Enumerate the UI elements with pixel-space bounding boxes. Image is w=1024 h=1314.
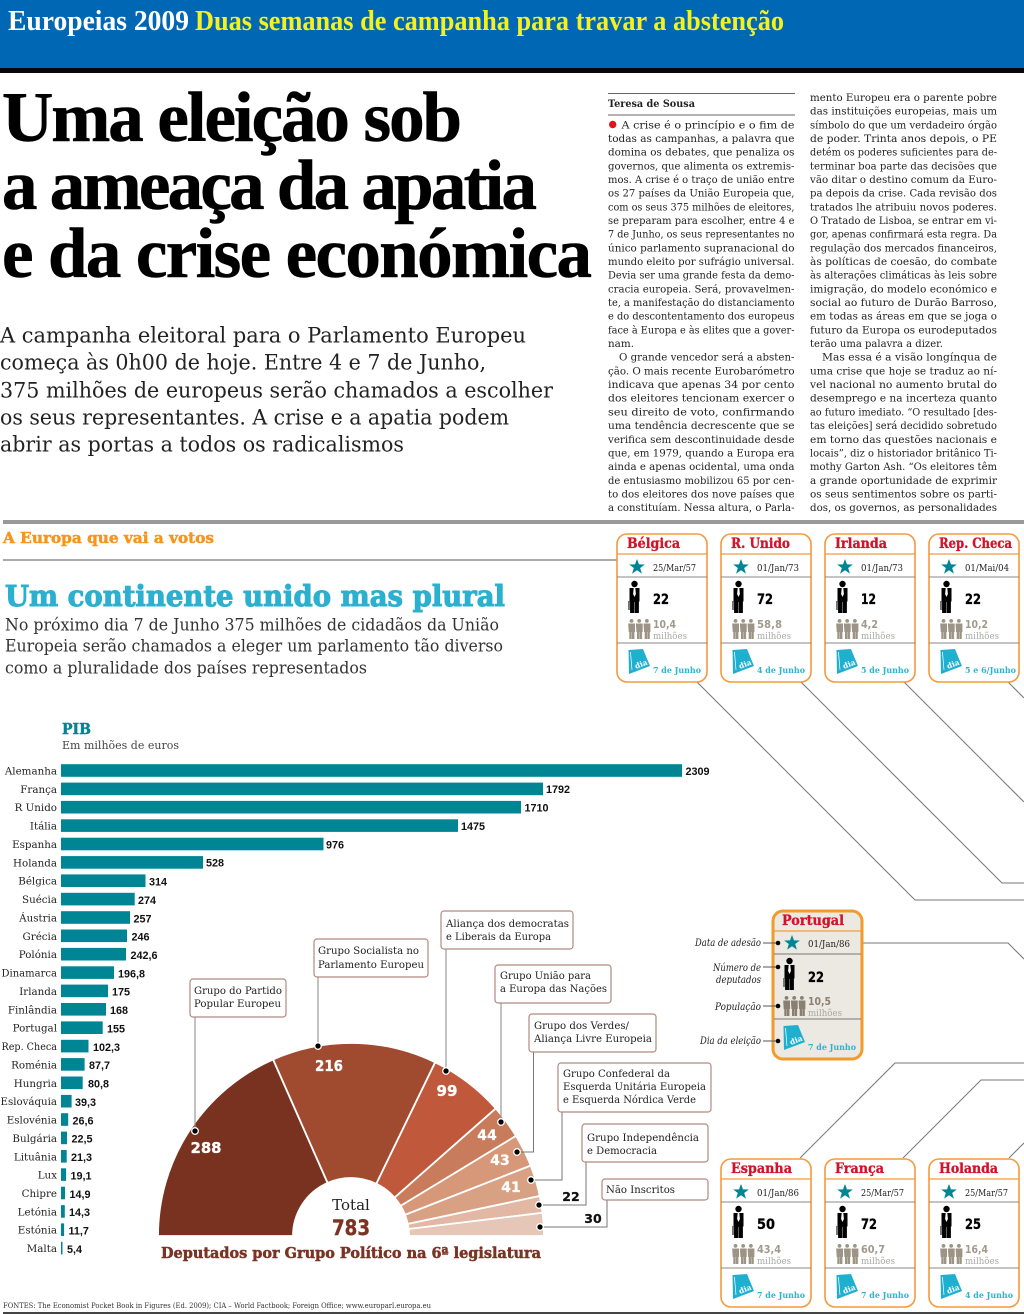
main headline: a ameaça da apatia — [2, 147, 537, 225]
article column 1: indicava que apenas 34 por cento — [608, 379, 794, 391]
card: Holanda: 25/Mar/57 — [965, 1188, 1008, 1199]
article column 1: te, a manifestação do distanciamento — [608, 297, 794, 309]
article column 2: social ao futuro de Durão Barroso, — [810, 297, 997, 309]
country labels: Rep. Checa — [2, 1041, 57, 1053]
seat numbers: 43 — [490, 1153, 510, 1169]
bar values — [67, 766, 710, 1256]
main headline — [2, 79, 592, 293]
card: França: 25/Mar/57 — [861, 1188, 904, 1199]
card: Rep. Checa: 10,2 — [965, 618, 988, 631]
bar values: 14,3 — [69, 1207, 90, 1219]
article column 1: que, em 1979, quando a Europa era — [608, 447, 794, 459]
card: Holanda — [929, 1159, 1019, 1307]
infographic intro: No próximo dia 7 de Junho 375 milhões de cidadãos da União — [5, 616, 499, 634]
callout: Grupo Socialista no Parlamento Europeu: Parlamento Europeu — [318, 959, 424, 971]
country labels: Lux — [38, 1170, 57, 1182]
article column 2: gor, apenas confirmará esta regra. Da — [810, 229, 997, 241]
callout: Grupo Confederal da Esquerda Unitária Europeia e Esquerda Nórdica Verde: Esquerda Unitária Europeia — [563, 1081, 706, 1093]
card: Bélgica: dia — [633, 658, 649, 671]
country labels: Itália — [30, 821, 57, 833]
chart heading: PIB: Em milhões de euros — [62, 739, 179, 752]
article column 1: cracia europeia. Será, provavelmen- — [608, 283, 795, 295]
article column 2: terminar boa parte das decisões que — [810, 160, 997, 172]
country labels — [0, 766, 57, 1255]
country labels: Dinamarca — [2, 968, 57, 980]
card: Espanha: 43,4 — [757, 1243, 781, 1256]
card: Rep. Checa: milhões — [965, 631, 999, 642]
callout: Grupo Independência e Democracia: e Democracia — [587, 1145, 657, 1157]
wedge: UEN 44 — [394, 1108, 516, 1206]
callout: Grupo do Partido Popular Europeu: Popular Europeu — [194, 998, 281, 1010]
article column 2: os seus sentimentos sobre os parti- — [810, 488, 997, 500]
callout: Grupo dos Verdes/Aliança Livre Europeia — [514, 1014, 656, 1155]
country labels: Bélgica — [18, 876, 57, 888]
callout: Não Inscritos — [537, 1179, 708, 1230]
country labels: Letónia — [18, 1206, 57, 1218]
card: Rep. Checa: 22 — [965, 592, 981, 608]
card: R. Unido — [721, 534, 811, 682]
article column 2: uma crise que hoje se traduz ao ní- — [810, 365, 997, 377]
country labels: Holanda — [13, 857, 57, 869]
article column 2: de poder. Trinta anos depois, o PE — [810, 133, 997, 145]
article column 1: mundo eleito por sufrágio universal. — [608, 256, 794, 268]
red bullet — [609, 121, 616, 128]
bar values: 2309 — [686, 766, 710, 778]
bar values: 102,3 — [93, 1042, 120, 1054]
article column 1: 7 de Junho, os seus representantes no — [608, 229, 794, 241]
article column 1: governos, que alimenta os extremis- — [608, 160, 795, 172]
article column 2: às alterações climáticas às leis sobre — [810, 270, 997, 282]
article column 2: locais”, diz o historiador britânico Ti- — [810, 447, 997, 459]
wedge: PPE 288 — [158, 1059, 328, 1236]
country labels: Roménia — [11, 1059, 57, 1071]
callout: Grupo União para a Europa das Nações: a Europa das Nações — [500, 983, 607, 995]
section tag: A Europa que vai a votos — [2, 529, 214, 547]
section headline: Duas semanas de campanha para travar a abstenção — [195, 6, 784, 37]
article column 2: pa depois da crise. Cada revisão dos — [810, 188, 997, 200]
card: Bélgica: Bélgica — [627, 536, 680, 552]
card: Irlanda: milhões — [861, 631, 895, 642]
article column 2: terão uma palavra a dizer. — [810, 338, 943, 350]
article column 2: desemprego e na incerteza quanto — [810, 393, 997, 405]
article column 1: Devia ser uma grande festa da demo- — [608, 270, 795, 282]
card: França: 60,7 — [861, 1243, 885, 1256]
standfirst: 375 milhões de europeus serão chamados a escolher — [0, 378, 554, 402]
country labels: Lituânia — [14, 1151, 57, 1163]
header band — [0, 0, 1024, 73]
article column 2: símbolo do que um verdadeiro órgão — [810, 119, 997, 131]
country labels: Portugal — [13, 1023, 57, 1035]
legend: dia da eleição: Dia da eleição — [699, 1036, 761, 1047]
country labels: Irlanda — [19, 986, 57, 998]
country labels: Áustria — [18, 910, 57, 924]
card: França: França — [835, 1161, 884, 1177]
article column 2: mothy Garton Ash. “Os eleitores têm — [810, 461, 997, 473]
article column 2: vel nacional no aumento brutal do — [809, 379, 997, 391]
article column 2: futuro da Europa os eurodeputados — [810, 324, 997, 336]
article column 1 — [607, 119, 795, 514]
card: R. Unido: milhões — [757, 631, 791, 642]
bar values: 168 — [110, 1005, 128, 1017]
card: Irlanda: Irlanda — [835, 536, 887, 552]
infographic intro: como a pluralidade dos países representados — [5, 658, 367, 678]
chart total — [332, 1196, 370, 1240]
article column 1: domina os debates, que penaliza os — [608, 147, 794, 159]
standfirst — [0, 324, 554, 456]
seat numbers: 99 — [436, 1082, 458, 1100]
article column 1: dos eleitores tencionam exercer o — [608, 393, 794, 405]
country labels: Eslováquia — [0, 1096, 57, 1108]
card: França: 7 de Junho — [861, 1291, 909, 1301]
country labels: Estónia — [18, 1225, 57, 1237]
country labels: Bulgária — [12, 1133, 57, 1145]
country labels: Grécia — [23, 931, 57, 943]
bar values: 976 — [326, 839, 344, 851]
callout: Grupo União para a Europa das Nações — [495, 965, 611, 1125]
country labels: Espanha — [12, 839, 57, 851]
chart total: Total — [332, 1196, 370, 1214]
article column 1: ção. O mais recente Eurobarómetro — [608, 365, 794, 377]
card: Espanha: 50 — [757, 1217, 775, 1233]
article column 1: uma tendência decrescente que se — [608, 420, 794, 432]
article column 2: mento Europeu era o parente pobre — [810, 92, 997, 104]
article column 1: se preparam para escolher, entre 4 e — [608, 215, 794, 227]
legend: data de adesão: Data de adesão — [694, 938, 761, 949]
callout: Grupo Socialista no Parlamento Europeu — [314, 939, 428, 1049]
country labels: Malta — [27, 1243, 57, 1255]
bar values: 274 — [138, 895, 156, 907]
section label: Europeias 2009 — [8, 6, 189, 37]
card: França: milhões — [861, 1256, 895, 1267]
article column 2: a grande oportunidade de exprimir — [810, 475, 998, 487]
callout: Grupo Independência e Democracia — [536, 1124, 708, 1208]
bar values: 1710 — [524, 802, 549, 814]
article column 2: às políticas de coesão, do combate — [810, 256, 997, 268]
infographic heading: Um continente unido mas plural — [5, 579, 505, 613]
article column 2: Mas essa é a visão longínqua de — [822, 352, 997, 364]
callout: Grupo do Partido Popular Europeu: Grupo do Partido — [194, 985, 282, 997]
callout: Aliança dos democratas e Liberais da Europa: Aliança dos democratas — [445, 918, 569, 930]
article column 1: A crise é o princípio e o fim de — [620, 119, 794, 131]
main headline: e da crise económica — [2, 215, 592, 293]
seat numbers — [190, 1057, 602, 1226]
bar values: 155 — [107, 1024, 125, 1036]
seat numbers: 288 — [190, 1139, 222, 1157]
card: Espanha: milhões — [757, 1256, 791, 1267]
article column 1: e do descontentamento dos europeus — [608, 311, 794, 323]
bar values: 1792 — [546, 784, 570, 796]
card: Portugal with legend: 10,5 — [808, 995, 831, 1008]
card: Espanha: dia — [737, 1283, 753, 1296]
card: Bélgica: 25/Mar/57 — [653, 563, 696, 574]
card: Holanda: milhões — [965, 1256, 999, 1267]
article column 1: O grande vencedor será a absten- — [619, 352, 795, 364]
card: Irlanda: 4,2 — [861, 618, 878, 631]
callout: Aliança dos democratas e Liberais da Europa — [441, 911, 573, 1074]
card: França: 72 — [861, 1217, 877, 1233]
article column 2: O Tratado de Lisboa, se entrar em vi- — [810, 215, 997, 227]
card: Espanha: 01/Jan/86 — [757, 1188, 799, 1199]
country labels: Hungria — [14, 1078, 57, 1090]
standfirst: começa às 0h00 de hoje. Entre 4 e 7 de Junho, — [0, 350, 486, 374]
card: Espanha: 7 de Junho — [757, 1291, 805, 1301]
card: Holanda: dia — [945, 1283, 961, 1296]
legend: população: População — [714, 1002, 761, 1013]
card: Rep. Checa: dia — [945, 658, 961, 671]
bar values: 242,6 — [130, 950, 158, 962]
card: Portugal with legend: 22 — [808, 970, 824, 986]
standfirst: abrir as portas a todos os radicalismos — [0, 432, 404, 456]
article column 1: to dos eleitores dos nove países que — [608, 488, 794, 500]
card: Rep. Checa: 01/Mai/04 — [965, 563, 1009, 574]
card: Portugal with legend: dia — [788, 1034, 804, 1047]
card: Irlanda: dia — [841, 658, 857, 671]
country labels: Suécia — [22, 894, 57, 906]
country labels: Finlândia — [8, 1004, 57, 1016]
article column 1: face à Europa e às elites que a gover- — [608, 324, 795, 336]
seat numbers: 22 — [562, 1189, 580, 1204]
bar values: 1475 — [461, 821, 485, 833]
card: Irlanda — [825, 534, 915, 682]
card: Bélgica: 10,4 — [653, 618, 676, 631]
standfirst: A campanha eleitoral para o Parlamento Europeu — [0, 324, 526, 348]
card: Portugal with legend: Portugal — [782, 913, 844, 929]
article column 2: tas eleições] será decidido sobretudo — [810, 420, 997, 432]
card: Portugal with legend: 7 de Junho — [808, 1043, 856, 1053]
card: Holanda: 4 de Junho — [965, 1291, 1013, 1301]
bar chart: PIB — [0, 764, 710, 1256]
callout: Grupo dos Verdes/Aliança Livre Europeia: Aliança Livre Europeia — [533, 1033, 652, 1045]
card: Bélgica: milhões — [653, 631, 687, 642]
card: Espanha — [721, 1159, 811, 1307]
wedge: GUE 41 — [405, 1166, 540, 1224]
country labels: Polónia — [19, 949, 57, 961]
chart total: 783 — [332, 1216, 370, 1240]
legend: número de deputados: Número de — [712, 963, 761, 974]
bar values: 175 — [112, 987, 130, 999]
card: R. Unido: 01/Jan/73 — [757, 563, 799, 574]
article column 1: único parlamento supranacional do — [608, 242, 794, 254]
country labels: Alemanha — [4, 766, 57, 778]
article column 1: a constituíam. Nessa altura, o Parla- — [608, 502, 795, 514]
card: Portugal with legend — [694, 911, 862, 1059]
article column 1: mos. A crise é o traço de união entre — [608, 174, 794, 186]
bar values: 39,3 — [75, 1097, 96, 1109]
card: R. Unido: 72 — [757, 592, 773, 608]
infographic intro: Europeia serão chamados a eleger um parlamento tão diverso — [5, 636, 503, 656]
card: Bélgica — [617, 534, 707, 682]
card: Holanda: 16,4 — [965, 1243, 988, 1256]
card: Holanda: 25 — [965, 1217, 981, 1233]
article column 2 — [809, 92, 998, 514]
article column 2: dos, os governos, as personalidades — [810, 502, 997, 514]
bar values: 21,3 — [71, 1152, 92, 1164]
bar values: 257 — [134, 913, 152, 925]
card: Portugal with legend: milhões — [808, 1008, 842, 1019]
bar values: 528 — [206, 858, 224, 870]
chart heading: PIB — [62, 721, 179, 752]
card: Irlanda: 01/Jan/73 — [861, 563, 903, 574]
card: R. Unido: R. Unido — [731, 536, 790, 552]
seat numbers: 30 — [584, 1211, 602, 1226]
country labels: Chipre — [22, 1188, 57, 1200]
article column 1: todas as campanhas, a palavra que — [608, 133, 794, 145]
card: Rep. Checa: 5 e 6/Junho — [965, 666, 1016, 676]
sources footer: FONTES: The Economist Pocket Book in Figures (Ed. 2009); CIA – World Factbook; Foreign Office; www.europarl.europa.eu — [3, 1301, 431, 1310]
article column 2: vão ditar o destino comum da Euro- — [809, 174, 997, 186]
bar values: 22,5 — [72, 1134, 93, 1146]
card: Holanda: Holanda — [939, 1161, 998, 1177]
seat numbers: 216 — [315, 1057, 343, 1075]
infographic intro — [5, 616, 503, 678]
callout: Grupo Confederal da Esquerda Unitária Europeia e Esquerda Nórdica Verde — [528, 1063, 711, 1183]
article column 2: detém os poderes suficientes para de- — [810, 147, 997, 159]
card: R. Unido: 4 de Junho — [757, 666, 805, 676]
callout: Aliança dos democratas e Liberais da Europa: e Liberais da Europa — [446, 931, 551, 943]
seat numbers: 41 — [501, 1180, 521, 1196]
legend: número de deputados — [712, 963, 780, 986]
bar values: 11,7 — [68, 1226, 89, 1238]
card: Bélgica: 7 de Junho — [653, 666, 701, 676]
article column 1: seu direito de voto, confirmando — [608, 406, 794, 418]
main headline: Uma eleição sob — [2, 79, 462, 157]
card: Espanha: Espanha — [731, 1161, 792, 1177]
bar values: 314 — [149, 876, 167, 888]
seat numbers: 44 — [477, 1128, 497, 1144]
card: Rep. Checa — [929, 534, 1019, 682]
card: França — [825, 1159, 915, 1307]
callout: Grupo Independência e Democracia: Grupo Independência — [587, 1132, 699, 1144]
callout: Grupo Socialista no Parlamento Europeu: Grupo Socialista no — [318, 945, 419, 957]
card: Portugal with legend: 01/Jan/86 — [808, 939, 850, 950]
article column 1: verifica sem descontinuidade desde — [607, 434, 794, 446]
callout: Grupo Confederal da Esquerda Unitária Europeia e Esquerda Nórdica Verde: Grupo Confederal da — [563, 1068, 670, 1080]
article column 1: de entusiasmo mobilizou 65 por cen- — [608, 475, 795, 487]
bar values: 196,8 — [118, 968, 145, 980]
article column 2: em todas as áreas em que se joga o — [810, 311, 997, 323]
callout: Não Inscritos: Não Inscritos — [606, 1184, 675, 1196]
byline: Teresa de Sousa — [608, 98, 695, 110]
bar values: 14,9 — [70, 1189, 91, 1201]
wedge: NI 30 — [409, 1213, 544, 1236]
country labels: Eslovénia — [7, 1114, 57, 1126]
article column 2: tratados lhe atribuiu novos poderes. — [810, 201, 997, 213]
article column 2: imigração, do modelo económico e — [810, 283, 997, 295]
card: R. Unido: dia — [737, 658, 753, 671]
bar values: 5,4 — [67, 1244, 82, 1256]
article column 1: os 27 países da União Europeia que, — [608, 188, 794, 200]
article column 1: com os seus 375 milhões de eleitores, — [608, 201, 794, 213]
article column 1: nam. — [608, 338, 634, 350]
article column 2: ao futuro imediato. “O resultado [des- — [810, 406, 997, 418]
bar values: 87,7 — [89, 1060, 110, 1072]
callout: Grupo do Partido Popular Europeu — [190, 979, 286, 1134]
card: Irlanda: 5 de Junho — [861, 666, 909, 676]
card: R. Unido: 58,8 — [757, 618, 782, 631]
chart caption: Deputados por Grupo Político na 6ª legislatura — [161, 1244, 541, 1262]
article column 2: regulação dos mercados financeiros, — [810, 242, 997, 254]
card: Irlanda: 12 — [861, 592, 876, 608]
callout: Grupo Confederal da Esquerda Unitária Europeia e Esquerda Nórdica Verde: e Esquerda Nórdica Verde — [563, 1094, 696, 1106]
chart heading: PIB: PIB — [62, 721, 91, 738]
article column 2: das instituições europeias, mais um — [810, 106, 997, 118]
bar values: 246 — [132, 932, 150, 944]
wedge: ALDE 99 — [376, 1062, 496, 1198]
card: Bélgica: 22 — [653, 592, 669, 608]
wedge: Verdes 43 — [401, 1136, 531, 1215]
country labels: França — [20, 784, 57, 796]
card: França: dia — [841, 1283, 857, 1296]
country labels: R Unido — [15, 802, 57, 814]
article column 1: ainda e apenas ocidental, uma onda — [608, 461, 794, 473]
wedge: PSE 216 — [273, 1043, 435, 1184]
bar values: 19,1 — [70, 1170, 92, 1182]
legend: número de deputados: deputados — [716, 975, 761, 986]
bar values: 26,6 — [72, 1115, 94, 1127]
callout: Grupo dos Verdes/Aliança Livre Europeia: Grupo dos Verdes/ — [534, 1020, 629, 1032]
connector lines — [697, 682, 1024, 1158]
wedge: IND/DEM 22 — [408, 1196, 543, 1229]
semicircle chart: deputados por grupo político — [158, 1043, 544, 1236]
standfirst: os seus representantes. A crise e a apatia podem — [0, 406, 509, 430]
bar values: 80,8 — [88, 1079, 109, 1091]
callout: Grupo União para a Europa das Nações: Grupo União para — [500, 970, 591, 982]
article column 2: em torno das questões nacionais e — [810, 434, 997, 446]
